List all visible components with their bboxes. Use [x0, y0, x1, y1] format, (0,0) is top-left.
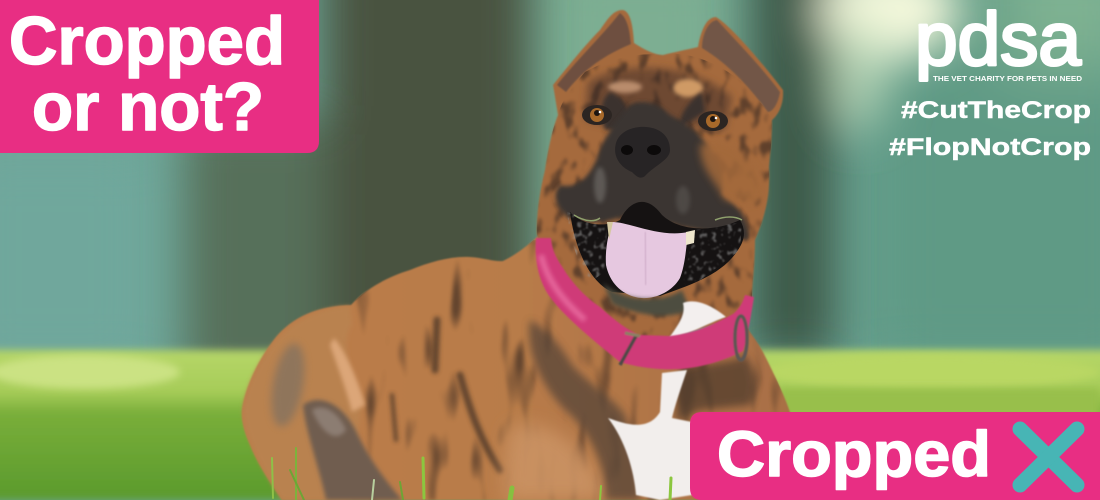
speckled lips [567, 212, 742, 281]
heading: or not?: or not? [32, 69, 264, 145]
dog [242, 0, 805, 500]
dog neck and head [530, 0, 790, 345]
background: grass [0, 350, 1100, 500]
tongue [606, 222, 688, 298]
hashtag: FlopNotCrop: #FlopNotCrop [889, 134, 1091, 161]
dog body [242, 236, 805, 500]
dark rear paw [303, 400, 402, 500]
heading: Cropped: Cropped [9, 3, 285, 79]
logo tagline: THE VET CHARITY FOR PETS IN NEED [933, 74, 1083, 83]
grass blades [272, 448, 671, 500]
brindle stripes on flank [392, 320, 500, 470]
collar ring [735, 316, 747, 360]
mouth [570, 202, 744, 296]
forehead markings [585, 68, 732, 155]
muzzle highlights [594, 167, 606, 203]
panel: title box [0, 0, 319, 153]
panel: cropped label [690, 412, 1100, 500]
collar loop buckle [620, 336, 636, 365]
icon: right eye [698, 111, 728, 131]
cheek fur [700, 142, 765, 203]
icon: nose [615, 127, 670, 178]
head fur texture [536, 54, 772, 336]
brindle texture [345, 240, 805, 500]
ear inner shades [557, 13, 631, 92]
hashtag: CutTheCrop: #CutTheCrop [901, 97, 1091, 124]
brindle shoulder patch [529, 320, 640, 500]
icon: left eye [582, 105, 612, 125]
muzzle dark mask [556, 102, 748, 240]
leg highlight [505, 425, 610, 500]
icon: teal cross [1020, 429, 1077, 485]
label text: Cropped: Cropped [717, 418, 991, 490]
lower jaw [603, 283, 690, 316]
rear leg [243, 306, 362, 500]
collar [536, 238, 754, 369]
white chest [608, 370, 692, 500]
white chin [669, 301, 726, 338]
